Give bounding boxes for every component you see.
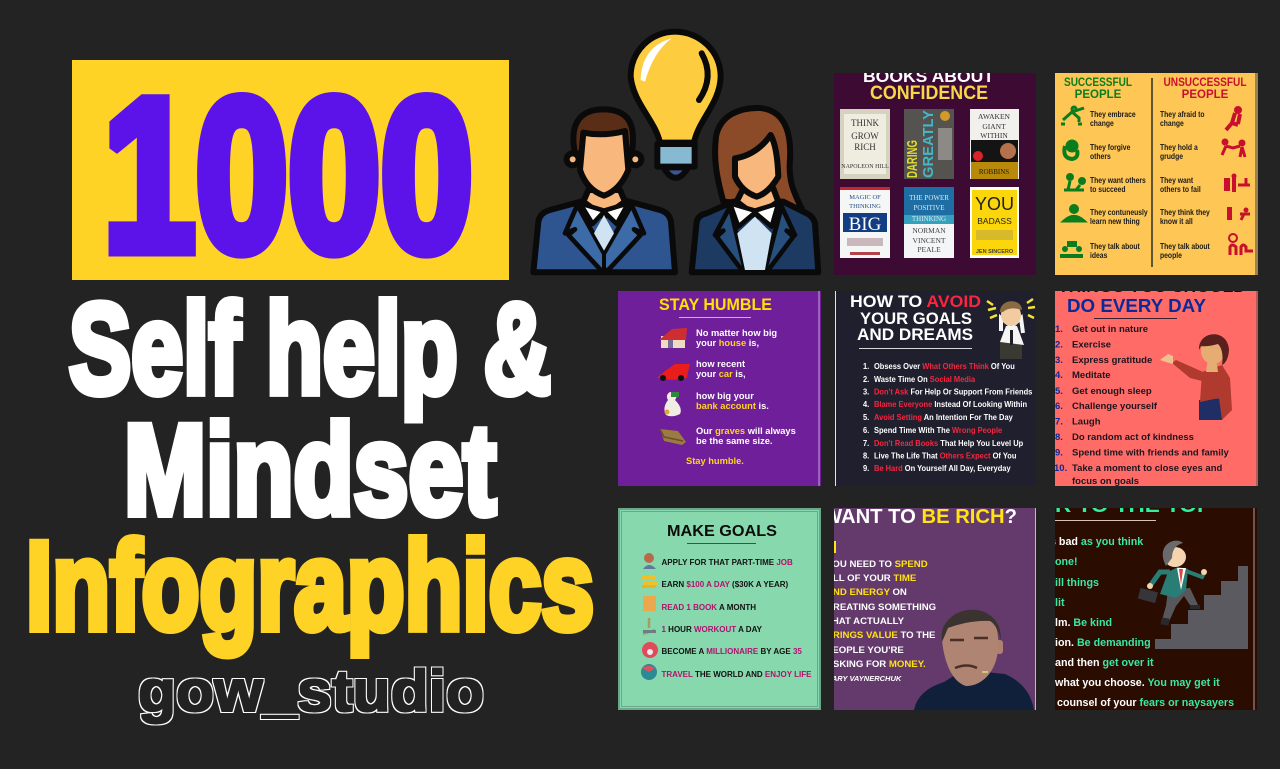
text: successful traits: learn new thing	[1090, 216, 1140, 226]
book: awaken the giant within: AWAKEN	[978, 112, 1011, 121]
icons: successful	[1060, 107, 1084, 258]
list: avoid list	[863, 362, 1033, 473]
list: daily habits: 6.	[1055, 401, 1063, 412]
heading: how to avoid your goals and dreams: HOW TO AVOID	[850, 293, 981, 311]
text: quote: YOU NEED TO SPEND	[826, 559, 928, 570]
text: successful traits: They talk about	[1090, 241, 1140, 251]
illustration: man climbing stairs	[1138, 541, 1207, 626]
list: avoid list: Live The Life That Others Expect Of You	[874, 451, 1017, 461]
book: awaken the giant within: WITHIN	[980, 131, 1008, 140]
heading: unsuccessful people: UNSUCCESSFUL	[1164, 77, 1246, 89]
text: quote: AND ENERGY ON	[826, 587, 907, 598]
text: successful traits: They embrace	[1090, 109, 1136, 119]
list: daily habits: Exercise	[1072, 340, 1111, 350]
illustration: stairs	[1155, 566, 1248, 649]
icon: coffin	[660, 429, 686, 445]
list: daily habits	[1054, 324, 1229, 487]
list: avoid list: 1.	[863, 362, 869, 371]
book: daring greatly: DARING	[904, 140, 921, 178]
icons: unsuccessful	[1222, 108, 1253, 255]
book: magic of thinking big: THINKING	[849, 203, 881, 210]
list: daily habits: 4.	[1055, 370, 1063, 381]
list: daily habits: Get enough sleep	[1072, 386, 1152, 397]
text: unsuccessful traits: They afraid to	[1160, 109, 1205, 119]
text: unsuccessful traits: people	[1160, 250, 1182, 260]
heading: how to avoid your goals and dreams	[850, 293, 981, 344]
illustration: woman pointing	[1160, 334, 1232, 420]
book: power of positive thinking: POSITIVE	[913, 204, 945, 212]
list: daily habits: 2.	[1055, 340, 1063, 350]
text: successful traits: change	[1090, 118, 1114, 128]
list: goals: BECOME A MILLIONAIRE BY AGE 35	[662, 647, 802, 656]
list: goals	[662, 558, 812, 679]
book: power of positive thinking: THINKING	[912, 215, 946, 223]
panel: want to be rich	[823, 506, 1036, 710]
icons: goal icons	[641, 553, 658, 680]
panel: successful vs unsuccessful people	[1055, 73, 1258, 275]
text: advice: and then get over it	[1055, 657, 1154, 669]
text: advice	[1050, 536, 1234, 709]
heading: do every day	[1062, 291, 1243, 312]
list: avoid list: Obsess Over What Others Think Of You	[874, 362, 1015, 371]
text: successful traits: to succeed	[1090, 184, 1126, 194]
list: goals: TRAVEL THE WORLD AND ENJOY LIFE	[662, 670, 812, 679]
icon: man	[533, 109, 675, 272]
list: goals: 1 HOUR WORKOUT A DAY	[662, 625, 763, 634]
text: advice: ion. Be demanding	[1055, 637, 1151, 649]
badge: 1000: 1000	[103, 54, 473, 296]
text: unsuccessful traits: They hold a	[1160, 142, 1198, 152]
heading: books about confidence: CONFIDENCE	[870, 83, 988, 104]
list: goals: APPLY FOR THAT PART-TIME JOB	[662, 558, 793, 567]
list: avoid list: Avoid Setting An Intention For The Day	[874, 413, 1013, 422]
heading: do every day: THINGS YOU SHOULD	[1058, 276, 1246, 296]
heading: successful people: SUCCESSFUL	[1064, 77, 1132, 89]
heading: how to avoid your goals and dreams: YOUR GOALS	[860, 310, 972, 328]
icon: house	[659, 328, 687, 348]
list: avoid list: Don't Read Books That Help You Level Up	[874, 439, 1023, 448]
heading: successful people	[1064, 77, 1132, 101]
book: think and grow rich: THINK	[851, 118, 879, 128]
list: avoid list: Blame Everyone Instead Of Looking Within	[874, 400, 1027, 409]
list: avoid list: 8.	[863, 451, 869, 461]
book: think and grow rich: NAPOLEON HILL	[841, 164, 889, 170]
photo: gary vaynerchuk	[914, 610, 1034, 710]
text: unsuccessful traits: They talk about	[1160, 241, 1210, 251]
text: advice: ill things	[1055, 577, 1099, 589]
text: quote: ASKING FOR MONEY.	[826, 659, 926, 670]
list: daily habits: Challenge yourself	[1072, 401, 1158, 412]
text: quote: GARY VAYNERCHUK	[826, 674, 902, 683]
panel: how to avoid your goals	[835, 291, 1036, 486]
book: magic of thinking big: BIG	[849, 214, 882, 235]
list: daily habits: Get out in nature	[1072, 324, 1148, 335]
title: Infographics: Infographics	[26, 517, 594, 656]
list: avoid list: Spend Time With The Wrong People	[874, 426, 1003, 435]
text: successful traits	[1090, 109, 1148, 260]
book: think and grow rich	[840, 109, 890, 179]
text: quote: BRINGS VALUE TO THE	[826, 630, 936, 641]
book: think and grow rich: GROW	[851, 131, 879, 141]
text: unsuccessful traits: They think they	[1160, 207, 1211, 217]
book: daring greatly: GREATLY	[920, 110, 937, 178]
list: goals: EARN $100 A DAY ($30K A YEAR)	[662, 580, 789, 589]
text: humble message: how big your	[696, 391, 754, 401]
list: daily habits: Laugh	[1072, 416, 1101, 428]
book: power of positive thinking: PEALE	[917, 245, 941, 254]
heading: unsuccessful people: PEOPLE	[1182, 89, 1229, 101]
list: daily habits: Meditate	[1072, 370, 1111, 381]
list: daily habits: Spend time with friends and family	[1072, 448, 1229, 458]
text: successful traits: They contuneusly	[1090, 207, 1148, 217]
book: power of positive thinking	[904, 187, 954, 258]
text: unsuccessful traits: They want	[1160, 175, 1194, 185]
list: avoid list: 9.	[863, 464, 869, 473]
heading: stay humble: STAY HUMBLE	[659, 296, 772, 314]
text: humble message: be the same size.	[696, 436, 772, 446]
heading: do every day: DO EVERY DAY	[1067, 296, 1206, 316]
list: avoid list: 6.	[863, 426, 869, 435]
heading: books about confidence	[864, 73, 990, 99]
text: humble message: Stay humble.	[686, 456, 744, 466]
text: humble message: how recent	[696, 359, 745, 369]
icon: money bag	[664, 392, 681, 416]
panel: climb to the top	[1055, 508, 1257, 710]
text: unsuccessful traits: know it all	[1160, 216, 1193, 226]
text: quote: ALL OF YOUR TIME	[826, 573, 917, 584]
list: avoid list: Waste Time On Social Media	[874, 375, 976, 384]
book: awaken the giant within: GIANT	[982, 122, 1006, 131]
text: quote: PEOPLE YOU'RE	[826, 645, 904, 656]
list: avoid list: Be Hard On Yourself All Day, Everyday	[874, 464, 1011, 473]
book: you are a badass: YOU	[975, 194, 1014, 214]
text: humble message: your car is,	[696, 369, 746, 379]
text: humble message: bank account is.	[696, 401, 769, 411]
text: humble message	[686, 328, 796, 466]
text: humble message: Our graves will always	[696, 426, 796, 436]
text: advice: lit	[1055, 597, 1065, 609]
list: daily habits: Do random act of kindness	[1072, 432, 1194, 443]
book: magic of thinking big: MAGIC OF	[849, 194, 881, 201]
list: avoid list: 7.	[863, 439, 869, 448]
list: daily habits: Take a moment to close eyes and	[1072, 463, 1222, 474]
heading: want to be rich: WANT TO BE RICH?	[823, 506, 1017, 528]
text: advice: one!	[1055, 556, 1078, 568]
text: successful traits: ideas	[1090, 250, 1107, 260]
list: daily habits: 5.	[1055, 386, 1063, 397]
book: think and grow rich: RICH	[854, 142, 876, 152]
book: you are a badass: BADASS	[977, 216, 1012, 226]
list: daily habits: 9.	[1055, 448, 1063, 458]
book: power of positive thinking: NORMAN	[912, 226, 946, 235]
heading: ladder to the top: ER TO THE TOP	[1040, 495, 1212, 517]
text: advice: counsel of your fears or naysayers	[1057, 697, 1234, 709]
icon: car	[657, 364, 690, 381]
list: daily habits: Express gratitude	[1072, 355, 1152, 366]
book: awaken the giant within	[970, 109, 1019, 179]
heading: how to avoid your goals and dreams: AND DREAMS	[857, 326, 973, 344]
panel: books about confidence	[834, 67, 1036, 275]
list: daily habits: 10.	[1054, 463, 1067, 474]
text: quote	[834, 560, 936, 681]
list: daily habits: focus on goals	[1072, 476, 1139, 487]
text: unsuccessful traits: others to fail	[1160, 184, 1201, 194]
list: avoid list: 3.	[863, 387, 869, 397]
list: daily habits: 8.	[1055, 432, 1063, 443]
text: advice: s bad as you think	[1050, 536, 1143, 548]
list: avoid list: Don't Ask For Help Or Support From Friends	[874, 387, 1033, 397]
text: unsuccessful traits	[1160, 109, 1211, 260]
text: quote: THAT ACTUALLY	[826, 616, 905, 627]
text: quote: CREATING SOMETHING	[826, 602, 936, 613]
panel: stay humble	[618, 291, 821, 486]
book: magic of thinking big	[840, 187, 890, 258]
illustration: stressed man	[987, 299, 1035, 359]
book: power of positive thinking: THE POWER	[909, 194, 949, 202]
book: power of positive thinking: VINCENT	[913, 236, 946, 245]
list: avoid list: 2.	[863, 375, 869, 384]
title: Self help & Mindset: Mindset	[124, 399, 496, 542]
title: Self help & Mindset: Self help &	[69, 278, 551, 421]
panel: things you should do every day	[1054, 276, 1258, 487]
heading: successful people: PEOPLE	[1075, 89, 1122, 101]
list: goals: READ 1 BOOK A MONTH	[662, 603, 756, 612]
title: Self help & Mindset	[69, 278, 551, 542]
heading: unsuccessful people	[1164, 77, 1246, 101]
book: awaken the giant within: ROBBINS	[979, 168, 1009, 176]
text: successful traits: others	[1090, 151, 1111, 161]
text: humble message: No matter how big	[696, 328, 777, 338]
list: daily habits: 7.	[1055, 416, 1063, 428]
text: successful traits: They forgive	[1090, 142, 1130, 152]
book: daring greatly	[904, 109, 954, 179]
list: avoid list: 5.	[863, 413, 869, 422]
list: daily habits: 1.	[1055, 324, 1063, 335]
text: advice: lm. Be kind	[1055, 617, 1112, 629]
icon: light bulb	[631, 32, 721, 178]
author: gow_studio: gow_studio	[138, 659, 484, 724]
panel: make goals	[618, 508, 821, 710]
icon: two business people and light bulb	[533, 32, 818, 272]
text: successful traits: They want others	[1090, 175, 1146, 185]
text: unsuccessful traits: grudge	[1160, 151, 1183, 161]
icon: woman	[692, 108, 818, 272]
list: daily habits: 3.	[1055, 355, 1063, 366]
book: you are a badass	[970, 187, 1019, 258]
text: advice: what you choose. You may get it	[1054, 677, 1220, 689]
text: humble message: your house is,	[696, 338, 759, 348]
heading: make goals: MAKE GOALS	[667, 523, 777, 540]
heading: books about confidence: BOOKS ABOUT	[863, 67, 995, 86]
text: unsuccessful traits: change	[1160, 118, 1184, 128]
list: avoid list: 4.	[863, 400, 869, 409]
book: you are a badass: JEN SINCERO	[976, 249, 1014, 255]
